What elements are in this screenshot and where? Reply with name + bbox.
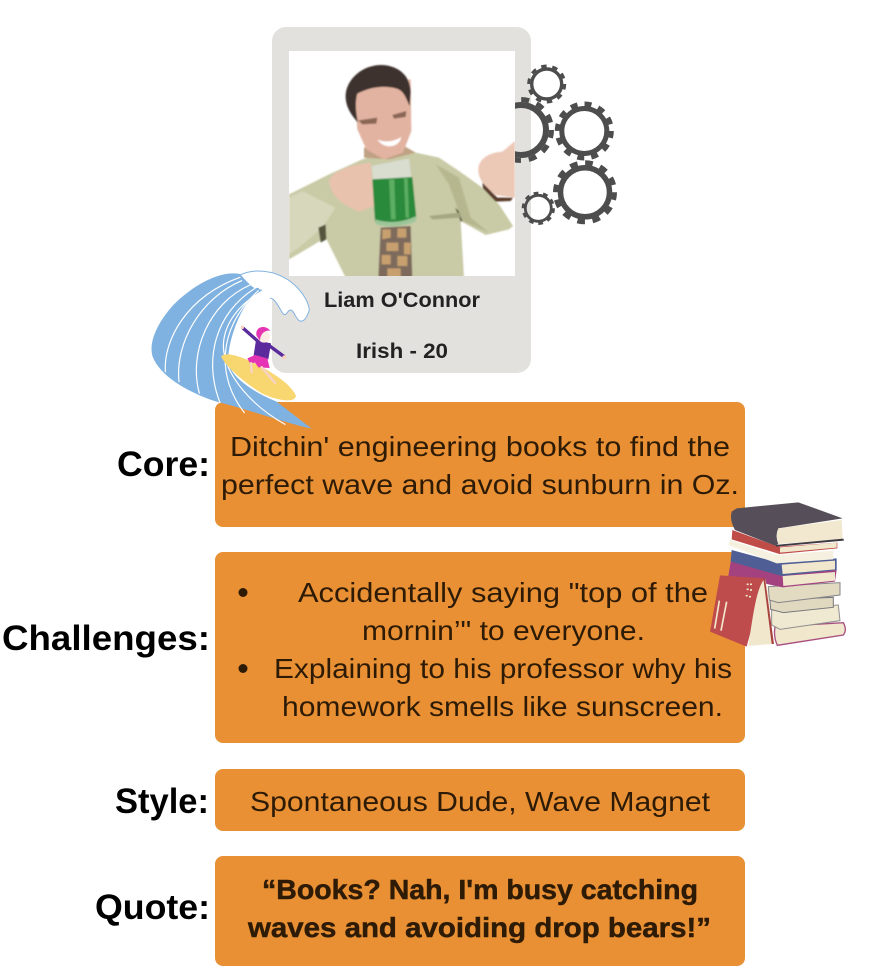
label: challenges: Challenges: — [2, 619, 210, 658]
panel: quote — [215, 856, 745, 966]
panel: challenges — [215, 552, 745, 743]
text: nationality and age: Irish - 20 — [356, 340, 448, 363]
bullet list: challenges — [238, 577, 732, 722]
text: core description — [221, 431, 739, 500]
label: style: Style: — [115, 782, 209, 821]
neck — [364, 146, 416, 159]
text: quote: “Books? Nah, I'm busy catching — [262, 874, 698, 905]
panel: core — [215, 402, 745, 527]
bullet list: challenges: Accidentally saying "top of the — [298, 577, 708, 608]
panel: style — [215, 769, 745, 831]
bullet list: challenges: homework smells like sunscreen. — [282, 691, 723, 722]
heading: name: Liam O'Connor — [324, 289, 480, 312]
text: style description: Spontaneous Dude, Wave Magnet — [250, 786, 710, 817]
text: quote — [247, 874, 711, 943]
pointing fist — [478, 141, 515, 198]
panel: profile card — [272, 27, 531, 373]
icon: stack of books — [710, 502, 845, 647]
bullet list: challenges: mornin’" to everyone. — [362, 615, 645, 646]
icon: wave with surfer — [152, 271, 312, 429]
icon: gears — [490, 66, 614, 224]
shirt — [289, 151, 513, 278]
face — [354, 79, 411, 159]
text: quote: waves and avoiding drop bears!” — [247, 912, 711, 943]
photo: man pointing with green beer — [289, 51, 515, 278]
hand holding mug — [329, 163, 374, 212]
hair — [346, 65, 411, 123]
label: quote: Quote: — [95, 888, 210, 927]
bullet list: challenges: Explaining to his professor why his — [274, 653, 732, 684]
tie — [378, 226, 412, 278]
label: core: Core: — [117, 445, 210, 484]
text: core description: Ditchin' engineering books to find the — [230, 431, 730, 462]
mug — [372, 158, 412, 181]
surfer on board — [221, 326, 296, 400]
text: core description: perfect wave and avoid sunburn in Oz. — [221, 469, 739, 500]
